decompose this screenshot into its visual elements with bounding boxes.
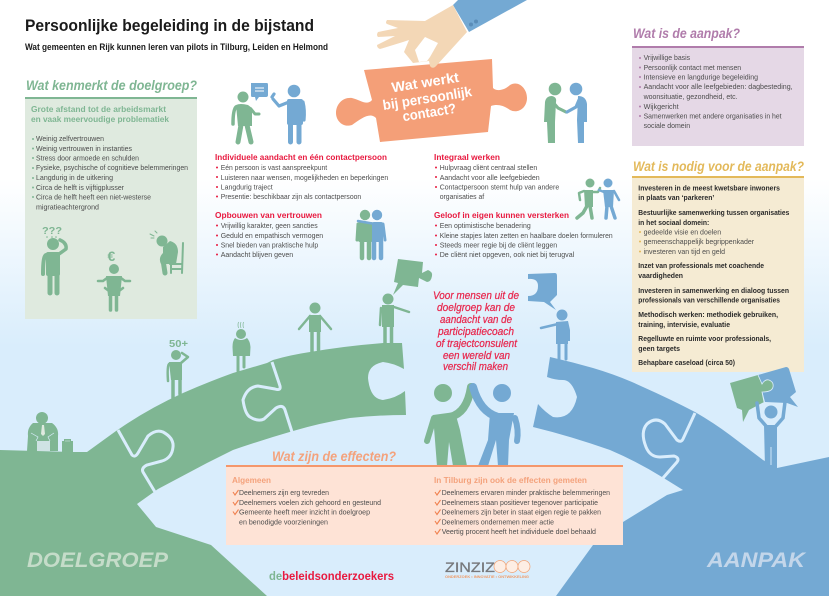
panel: wat is de aanpak: Wijkgericht (644, 102, 679, 111)
panel: wat is de aanpak: Aandacht voor alle leefgebieden: dagbesteding, (644, 82, 793, 91)
text block: geloof in eigen kunnen: Steeds meer regie bij de cliënt leggen (440, 240, 557, 250)
text block: opbouwen van vertrouwen: Opbouwen van vertrouwen (215, 210, 322, 220)
text block: geloof in eigen kunnen: De cliënt niet opgeven, ook niet bij terugval (440, 250, 575, 259)
panel: wat is nodig voor de aanpak: professionals van verschillende organisaties (638, 296, 780, 304)
panel: wat is de aanpak: Samenwerken met andere organisaties in het (644, 112, 782, 120)
panel: wat is nodig voor de aanpak: training, intervisie, evaluatie (638, 320, 731, 329)
puzzle piece: wat werkt: bij persoonlijk (382, 83, 473, 113)
panel: wat zijn de effecten: Deelnemers ondernemen meer actie (442, 517, 554, 526)
puzzle piece: wat werkt: Wat werkt (390, 69, 460, 95)
icon: confused person: ??? (42, 226, 62, 237)
panel: wat zijn de effecten: Deelnemers ervaren minder praktische belemmeringen (442, 488, 610, 497)
icon: hand and sleeve (377, 0, 527, 68)
panel: wat kenmerkt de doelgroep: Grote afstand tot de arbeidsmarkt (31, 104, 166, 114)
text block: individuele aandacht: Individuele aandacht en één contactpersoon (215, 152, 387, 162)
subtitle: Wat gemeenten en Rijk kunnen leren van pilots in Tilburg, Leiden en Helmond (25, 42, 328, 52)
icon: person with empty pockets (98, 248, 130, 310)
title: Persoonlijke begeleiding in de bijstand (25, 16, 314, 35)
text block: individuele aandacht: Eén persoon is vast aanspreekpunt (221, 163, 327, 172)
panel: wat is de aanpak: Vrijwillige basis (644, 53, 690, 62)
panel: wat zijn de effecten: Algemeen (232, 475, 271, 485)
callout: red italic statement: Voor mensen uit de (433, 290, 519, 302)
text block: geloof in eigen kunnen: Een optimistische benadering (440, 221, 531, 230)
heading: doelgroep: Wat kenmerkt de doelgroep? (26, 78, 197, 93)
panel: wat zijn de effecten: In Tilburg zijn ook de effecten gemeten (434, 475, 587, 485)
panel: wat kenmerkt de doelgroep: Langdurig in de uitkering (36, 173, 113, 182)
panel: wat is nodig voor de aanpak: Investeren in samenwerking en dialoog tussen (638, 286, 789, 295)
icon: person with green speech bubble (380, 259, 432, 343)
panel: wat kenmerkt de doelgroep: en vaak meervoudige problematiek (31, 114, 169, 124)
panel: wat kenmerkt de doelgroep: migratieachtergrond (36, 202, 99, 212)
icon: confused person (42, 226, 66, 293)
heading: nodig: Wat is nodig voor de aanpak? (633, 159, 804, 174)
panel: wat zijn de effecten (226, 449, 623, 545)
logo: de beleidsonderzoekers: debeleidsonderzoekers (269, 571, 394, 583)
panel: wat kenmerkt de doelgroep: Fysieke, psychische of cognitieve belemmeringen (36, 163, 188, 172)
panel: wat is de aanpak: sociale domein (644, 121, 690, 130)
callout: red italic statement: een wereld van (443, 350, 510, 362)
panel: wat is nodig voor de aanpak: Bestuurlijke samenwerking tussen organisaties (638, 208, 789, 217)
callout: red italic statement: verschil maken (443, 361, 508, 373)
icon: person 50+ (168, 338, 188, 398)
text block: individuele aandacht: Luisteren naar wensen, mogelijkheden en beperkingen (221, 173, 388, 182)
icon: person 50+: 50+ (169, 338, 188, 350)
text block: integraal werken: Contactpersoon stemt hulp van andere (440, 182, 559, 192)
panel: wat is de aanpak: Intensieve en langdurige begeleiding (644, 72, 758, 82)
panel: wat is nodig voor de aanpak: investeren van tijd en geld (644, 247, 725, 256)
heading: effecten: Wat zijn de effecten? (272, 449, 396, 464)
label: doelgroep: DOELGROEP (27, 549, 169, 572)
blue bridge and ground: aanpak (533, 357, 829, 596)
panel: wat kenmerkt de doelgroep (25, 78, 197, 319)
text block: opbouwen van vertrouwen: Aandacht blijven geven (221, 250, 293, 259)
green bridge and ground: doelgroep (0, 343, 406, 596)
icon: person with empty pockets: € (108, 248, 116, 264)
text block: opbouwen van vertrouwen (215, 210, 323, 259)
text block: integraal werken: Integraal werken (434, 152, 500, 162)
logo: zinzizooo: ZINZIZ (445, 559, 496, 575)
panel: wat kenmerkt de doelgroep: Weinig vertrouwen in instanties (36, 144, 132, 153)
panel: wat is nodig voor de aanpak: in het sociaal domein: (638, 218, 709, 227)
panel: wat is de aanpak: Persoonlijk contact met mensen (644, 63, 741, 72)
panel: wat zijn de effecten: en benodigde voorzieningen (239, 517, 328, 526)
puzzle piece: wat werkt: contact? (401, 100, 457, 124)
panel: wat is nodig voor de aanpak: gemeenschappelijk begrippenkader (644, 237, 755, 246)
text block: opbouwen van vertrouwen: Snel bieden van praktische hulp (221, 240, 318, 250)
panel: wat zijn de effecten: Deelnemers voelen zich gehoord en gesteund (239, 498, 381, 507)
text block: opbouwen van vertrouwen: Vrijwillig karakter, geen sancties (221, 221, 318, 230)
callout: red italic statement: of trajectconsulent (436, 338, 518, 350)
panel: wat is nodig voor de aanpak: Inzet van professionals met coachende (638, 261, 765, 270)
text block: geloof in eigen kunnen: Geloof in eigen kunnen versterken (434, 210, 569, 220)
text block: geloof in eigen kunnen: Kleine stapjes laten zetten en haalbare doelen formuleren (440, 231, 613, 240)
text block: integraal werken: Hulpvraag cliënt centraal stellen (440, 163, 537, 172)
text block: integraal werken (434, 152, 559, 201)
panel: wat zijn de effecten: Gemeente heeft meer inzicht in doelgroep (239, 508, 370, 517)
panel: wat is de aanpak: woonsituatie, gezondheid, etc. (643, 92, 738, 101)
panel: wat kenmerkt de doelgroep: Circa de helft is vijftigplusser (36, 183, 125, 192)
text block: opbouwen van vertrouwen: Geduld en empathisch vermogen (221, 231, 323, 240)
panel: wat is nodig voor de aanpak: vaardigheden (638, 271, 683, 280)
callout: red italic statement: aandacht van de (440, 314, 512, 326)
heading: aanpak: Wat is de aanpak? (633, 26, 740, 41)
panel: wat zijn de effecten: Veertig procent heeft het individuele doel behaald (442, 527, 596, 536)
icon: high five figures (427, 384, 518, 466)
panel: wat is nodig voor de aanpak: gedeelde visie en doelen (644, 228, 721, 236)
panel: wat is nodig voor de aanpak: geen targets (638, 344, 680, 353)
icon: two people arm in arm (357, 210, 385, 258)
panel: wat zijn de effecten: Deelnemers staan positiever tegenover participatie (442, 498, 598, 507)
text block: integraal werken: Aandacht voor alle leefgebieden (440, 173, 540, 182)
icon: handshake (544, 83, 587, 143)
panel: wat is nodig voor de aanpak: Methodisch werken: methodiek gebruiken, (638, 310, 778, 319)
panel: wat is nodig voor de aanpak: Behapbare caseload (circa 50) (638, 358, 735, 367)
text block: individuele aandacht: Langdurig traject (221, 182, 273, 192)
panel: wat kenmerkt de doelgroep: Circa de helft heeft een niet-westerse (36, 192, 151, 202)
icon: sitting businessman with briefcase (27, 412, 73, 452)
text block: individuele aandacht: Presentie: beschikbaar zijn als contactpersoon (221, 192, 361, 201)
panel: wat is nodig voor de aanpak: in plaats van ‘parkeren’ (638, 193, 714, 202)
panel: wat is nodig voor de aanpak: Investeren in de meest kwetsbare inwoners (638, 184, 780, 192)
panel: wat kenmerkt de doelgroep: Weinig zelfvertrouwen (36, 134, 104, 143)
icon: person with head in hands on chair (150, 231, 183, 273)
text block: geloof in eigen kunnen (434, 210, 613, 259)
icon: tired person with steam (232, 322, 250, 371)
panel: wat zijn de effecten: Deelnemers zijn erg tevreden (239, 488, 329, 497)
panel: wat is de aanpak (632, 26, 804, 146)
icon: person holding puzzle speech bubbles (730, 367, 798, 468)
logo: zinzizooo (445, 559, 530, 579)
callout: red italic statement: doelgroep kan de (437, 302, 515, 314)
label: aanpak: AANPAK (706, 549, 807, 572)
puzzle piece: hand holding (336, 0, 527, 142)
panel: wat is nodig voor de aanpak: Regelluwte en ruimte voor professionals, (638, 334, 771, 343)
puzzle piece: wat werkt (336, 59, 527, 142)
panel: wat zijn de effecten: Deelnemers zijn beter in staat eigen regie te pakken (442, 508, 601, 517)
icon: two people walking and reaching (577, 178, 619, 218)
icon: person with arms spread (299, 302, 331, 352)
callout: red italic statement: participatiecoach (437, 326, 514, 338)
text block: individuele aandacht (215, 152, 388, 201)
icon: person with blue speech bubble (528, 273, 570, 359)
icon: two people talking (233, 83, 304, 142)
panel: wat kenmerkt de doelgroep: Stress door armoede en schulden (36, 154, 139, 162)
callout: red italic statement (433, 290, 519, 373)
panel: wat is nodig voor de aanpak (632, 159, 804, 372)
logo: zinzizooo: ONDERZOEK • INNOVATIE • ONTWIKKELING (445, 575, 529, 579)
text block: integraal werken: organisaties af (440, 192, 484, 201)
